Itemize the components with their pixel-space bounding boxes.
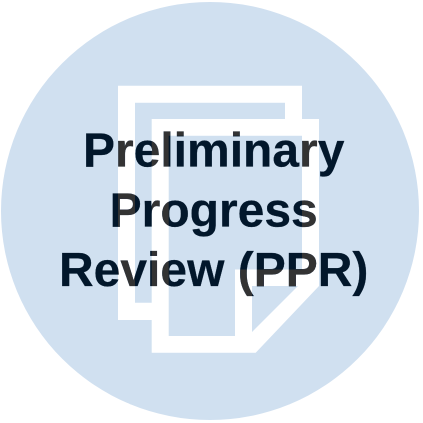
title text: Review (PPR): [59, 244, 368, 297]
title text: Progress: [110, 184, 318, 238]
icon: stacked documents: [118, 86, 319, 353]
title text: [59, 125, 368, 297]
icon overlay tinting text over white areas: [118, 86, 319, 353]
title text: Preliminary: [83, 125, 345, 178]
